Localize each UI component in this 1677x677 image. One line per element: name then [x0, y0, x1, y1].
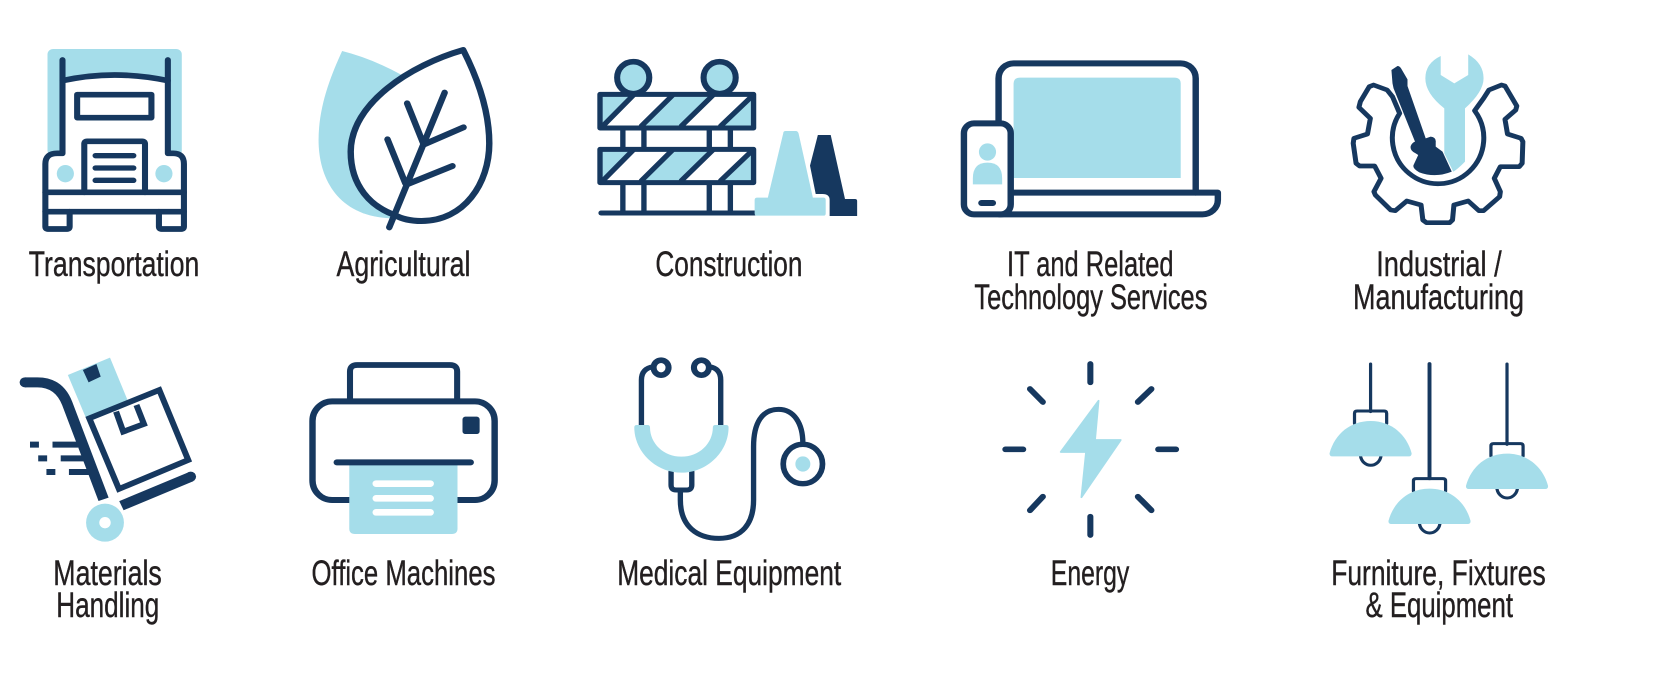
panel: Transportation	[29, 49, 199, 284]
icon: barricade and cones	[600, 62, 857, 216]
panel: Office Machines	[312, 365, 496, 593]
panel: Materials Handling	[20, 358, 196, 625]
panel: Construction	[600, 62, 857, 284]
panel: Industrial / Manufacturing	[1353, 54, 1524, 317]
icon: truck	[45, 49, 184, 229]
panel: Furniture, Fixtures & Equipment	[1330, 364, 1548, 625]
label: Office Machines: Office Machines	[312, 554, 496, 593]
label: Energy: Energy	[1051, 554, 1130, 593]
label: Industrial / Manufacturing	[1353, 245, 1524, 317]
icon: pendant lamps	[1330, 364, 1548, 533]
label: Medical Equipment: Medical Equipment	[617, 554, 841, 593]
label: Materials Handling	[53, 554, 162, 625]
label: Materials Handling: Handling	[56, 586, 159, 625]
label: Industrial / Manufacturing: Industrial /	[1376, 245, 1502, 284]
label: IT and Related Technology Services	[974, 245, 1207, 317]
icon: leaf	[319, 50, 489, 227]
label: Materials Handling: Materials	[53, 554, 162, 593]
label: Agricultural: Agricultural	[336, 245, 470, 284]
label: IT and Related Technology Services: IT and Related	[1007, 245, 1174, 284]
icon: lightning bolt with rays	[1005, 364, 1176, 535]
label: Furniture, Fixtures & Equipment: Furniture, Fixtures	[1331, 554, 1546, 593]
icon: printer	[312, 365, 495, 534]
label: Furniture, Fixtures & Equipment	[1331, 554, 1546, 625]
icon: laptop and phone	[964, 63, 1218, 214]
icon: gear with wrench and screwdriver	[1353, 54, 1523, 223]
label: IT and Related Technology Services: Technology Services	[974, 278, 1207, 317]
panel: Energy	[1005, 364, 1176, 593]
panel: Agricultural	[319, 50, 489, 284]
label: Transportation: Transportation	[29, 245, 199, 284]
panel: Medical Equipment	[617, 360, 841, 593]
icon: hand truck with boxes	[20, 358, 196, 545]
icon: stethoscope	[634, 360, 822, 538]
label: Construction: Construction	[655, 245, 802, 284]
label: Industrial / Manufacturing: Manufacturing	[1353, 278, 1524, 317]
panel: IT and Related Technology Services	[964, 63, 1218, 317]
label: Furniture, Fixtures & Equipment: & Equipment	[1366, 586, 1513, 625]
